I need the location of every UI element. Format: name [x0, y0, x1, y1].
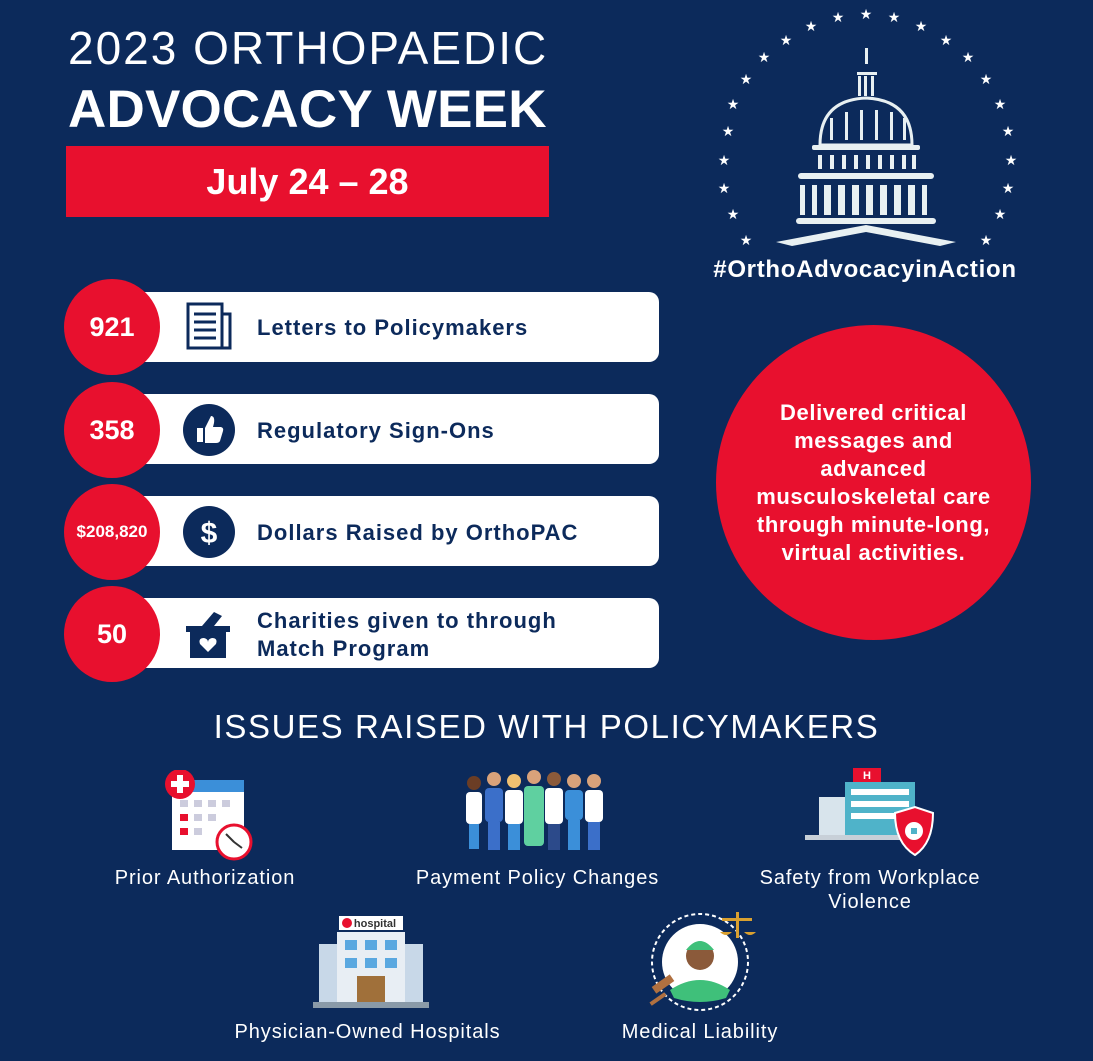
icon: capitol with stars: ★	[1005, 152, 1017, 168]
icon: capitol with stars: ★	[832, 9, 844, 25]
stat row: dollars	[64, 484, 659, 580]
date banner	[66, 146, 549, 217]
icon: capitol with stars: ★	[740, 71, 752, 87]
icon: capitol with stars: ★	[805, 18, 817, 34]
issue: prior authorization: Prior Authorization	[115, 867, 295, 889]
icon: capitol with stars: ★	[1002, 123, 1014, 139]
stat row: charities	[64, 586, 659, 682]
icon: capitol with stars: ★	[860, 6, 872, 22]
callout circle	[716, 325, 1031, 640]
stat row: charities: Match Program	[257, 636, 430, 661]
icon: dollar: $	[201, 517, 218, 550]
issue: prior authorization	[115, 770, 295, 889]
icon: capitol with stars: ★	[980, 232, 992, 248]
icon: capitol with stars: ★	[915, 18, 927, 34]
icon: capitol with stars	[718, 6, 1017, 248]
icon: capitol with stars: ★	[718, 180, 730, 196]
icon: capitol with stars: ★	[994, 206, 1006, 222]
stat row: letters: 921	[89, 312, 135, 342]
stat row: sign-ons	[64, 382, 659, 478]
callout circle: Delivered critical	[780, 400, 967, 424]
icon: capitol with stars: ★	[722, 123, 734, 139]
callout circle: advanced	[820, 456, 927, 480]
date banner: July 24 – 28	[206, 160, 409, 202]
icon: hospital building: hospital	[354, 918, 396, 930]
icon: capitol with stars: ★	[780, 32, 792, 48]
issue: physician-owned hospitals: Physician-Owned Hospitals	[235, 1021, 500, 1043]
icon: capitol with stars: ★	[994, 96, 1006, 112]
icon: dollar	[183, 506, 235, 558]
icon: doctor with scales and gavel	[650, 912, 756, 1011]
stat row: charities: 50	[97, 618, 127, 648]
callout circle: through minute-long,	[757, 512, 990, 536]
icon: hospital with shield	[805, 768, 934, 856]
issue: medical liability: Medical Liability	[622, 1021, 778, 1043]
icon: capitol with stars: ★	[962, 49, 974, 65]
callout circle: virtual activities.	[782, 540, 965, 564]
icon: donation box	[186, 612, 230, 658]
icon: capitol with stars: ★	[1002, 180, 1014, 196]
icon: hospital building	[313, 916, 429, 1008]
issue: workplace violence: Safety from Workplace	[760, 867, 980, 889]
issue: medical liability	[622, 912, 778, 1043]
stat row: dollars: Dollars Raised by OrthoPAC	[257, 520, 578, 545]
icon: capitol with stars: ★	[980, 71, 992, 87]
icon: capitol with stars: ★	[718, 152, 730, 168]
icon: document	[186, 302, 232, 350]
icon: capitol with stars: ★	[888, 9, 900, 25]
icon: capitol with stars: ★	[727, 96, 739, 112]
icon: hospital with shield: H	[863, 770, 871, 782]
issue: workplace violence: Violence	[828, 891, 912, 913]
stat row: sign-ons: Regulatory Sign-Ons	[257, 418, 495, 443]
stat row: letters: Letters to Policymakers	[257, 315, 528, 340]
icon: thumbs up	[183, 404, 235, 456]
icon: healthcare workers	[466, 770, 603, 850]
issue: payment policy: Payment Policy Changes	[416, 867, 659, 889]
issue: payment policy	[416, 770, 659, 889]
stat row: letters	[64, 279, 659, 375]
icon: calendar	[165, 770, 252, 860]
icon: capitol with stars: ★	[758, 49, 770, 65]
callout circle: musculoskeletal care	[756, 484, 991, 508]
title: 2023 ORTHOPAEDIC	[68, 22, 548, 74]
icon: capitol with stars: ★	[940, 32, 952, 48]
issue: workplace violence	[760, 768, 980, 913]
hashtag: #OrthoAdvocacyinAction	[713, 256, 1017, 283]
icon: capitol with stars: ★	[727, 206, 739, 222]
stat row: dollars: $208,820	[77, 522, 147, 541]
stat row: charities: Charities given to through	[257, 608, 557, 633]
section heading: ISSUES RAISED WITH POLICYMAKERS	[214, 708, 879, 745]
icon: capitol with stars: ★	[740, 232, 752, 248]
title: ADVOCACY WEEK	[68, 80, 547, 139]
issue: physician-owned hospitals	[235, 916, 500, 1043]
title	[68, 22, 548, 139]
callout circle: messages and	[794, 428, 953, 452]
stat row: sign-ons: 358	[89, 414, 135, 444]
